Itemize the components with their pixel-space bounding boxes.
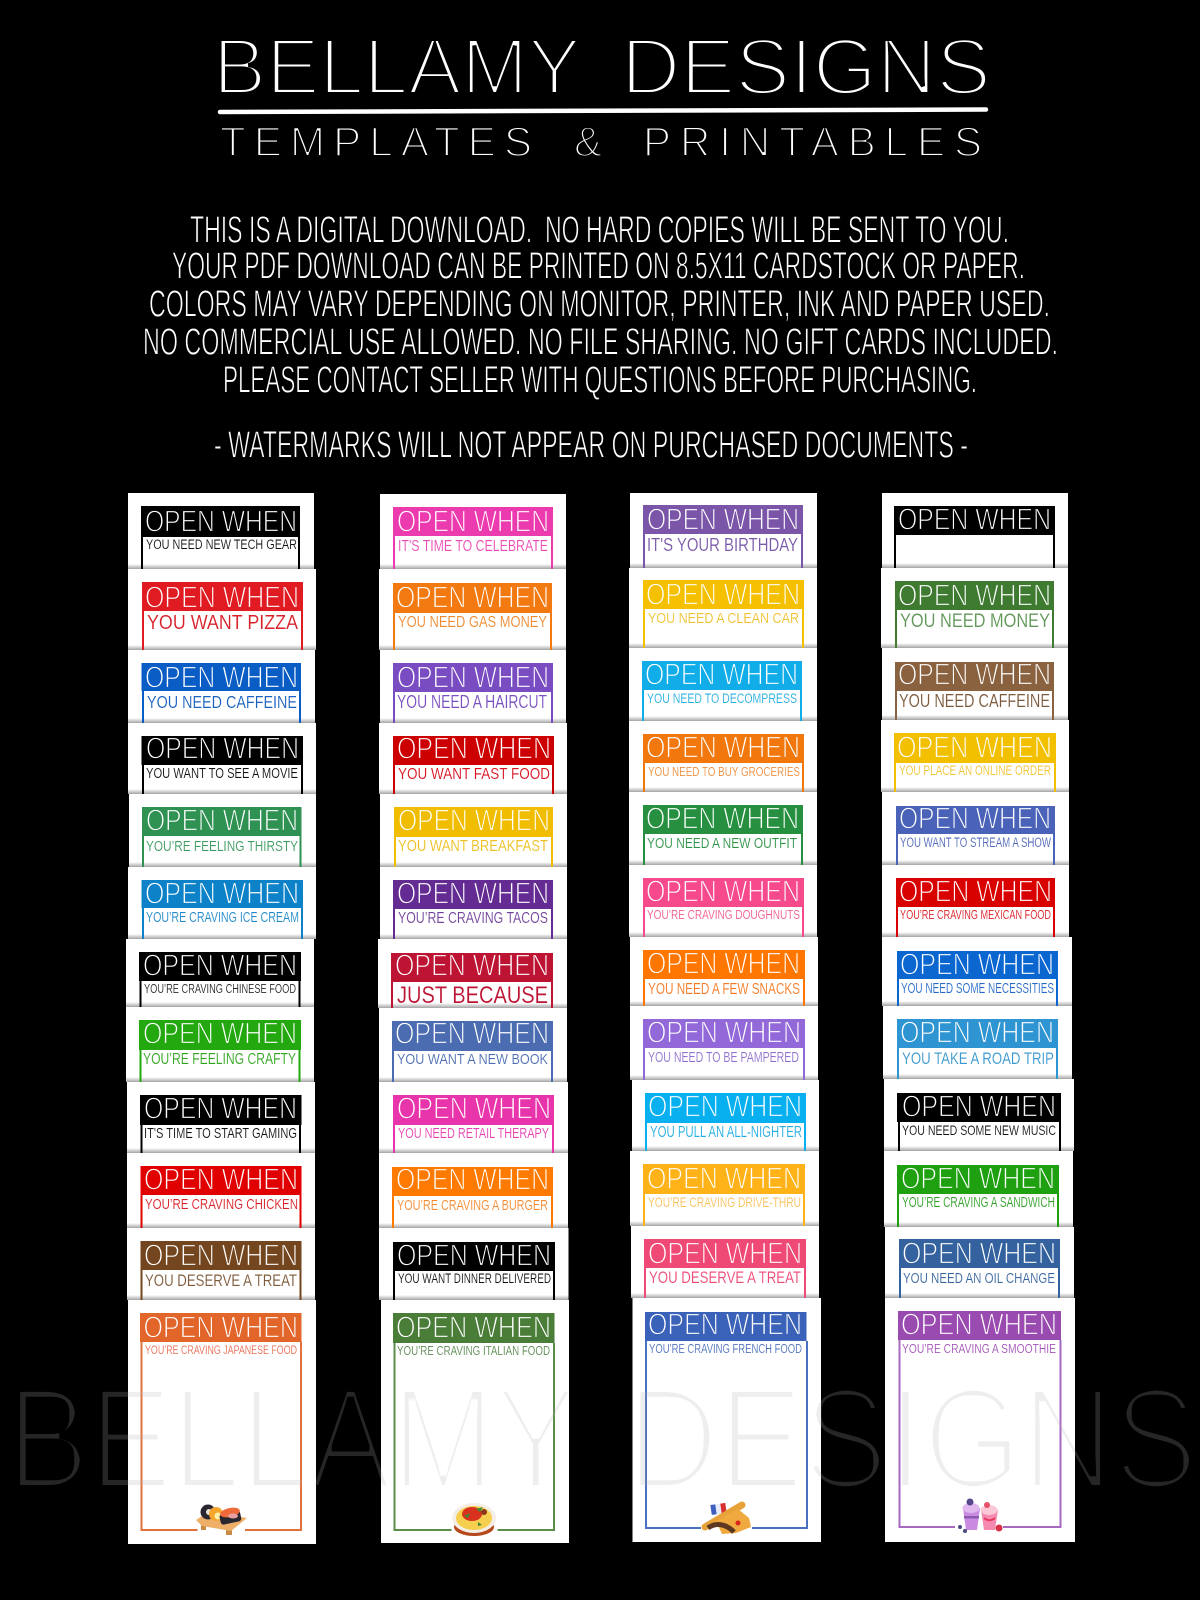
card: it's time to celebrate xyxy=(380,494,566,569)
header band: OPEN WHEN xyxy=(396,1310,551,1344)
card: you're craving ice cream xyxy=(128,867,316,939)
card: you're craving italian food xyxy=(381,1300,569,1543)
card: you deserve a treat pink xyxy=(631,1226,819,1298)
prompt: YOU NEED TO DECOMPRESS xyxy=(647,691,797,706)
subtitle xyxy=(220,118,982,165)
subtitle: TEMPLATES xyxy=(220,118,532,165)
header band: OPEN WHEN xyxy=(396,580,549,614)
header band: OPEN WHEN xyxy=(397,876,549,910)
card: you want pizza xyxy=(128,569,316,650)
card: you take a road trip xyxy=(883,1006,1072,1079)
card: you're craving a smoothie xyxy=(885,1298,1075,1542)
prompt: YOU NEED GAS MONEY xyxy=(398,614,547,631)
header band: OPEN WHEN xyxy=(397,660,549,694)
prompt: YOU’RE CRAVING ICE CREAM xyxy=(146,910,299,926)
prompt: YOU NEED TO BE PAMPERED xyxy=(648,1049,799,1066)
header band: OPEN WHEN xyxy=(395,948,549,982)
prompt: YOU NEED A NEW OUTFIT xyxy=(647,835,797,852)
brand title: BELLAMY xyxy=(213,22,581,111)
card: it's your birthday xyxy=(630,493,817,568)
header band: OPEN WHEN xyxy=(397,1238,551,1272)
prompt: YOU DESERVE A TREAT xyxy=(649,1269,801,1287)
prompt: YOU NEED CAFFEINE xyxy=(899,690,1050,711)
prompt: YOU NEED SOME NECESSITIES xyxy=(901,980,1054,997)
card: you need caffeine blue xyxy=(128,650,315,723)
title underline xyxy=(220,110,986,112)
prompt: YOU WANT TO STREAM A SHOW xyxy=(900,835,1051,850)
prompt: YOU NEED A CLEAN CAR xyxy=(648,610,799,627)
prompt: YOU TAKE A ROAD TRIP xyxy=(902,1050,1054,1068)
prompt: YOU NEED NEW TECH GEAR xyxy=(146,537,297,552)
card: you need some new music xyxy=(884,1079,1074,1151)
header band: OPEN WHEN xyxy=(646,800,799,836)
header band: OPEN WHEN xyxy=(144,1162,298,1196)
header band: OPEN WHEN xyxy=(143,1016,297,1050)
card: you deserve a treat brown xyxy=(127,1228,315,1300)
header band: OPEN WHEN xyxy=(902,1088,1056,1124)
card: you need a new outfit xyxy=(629,792,817,865)
card: you pull an all-nighter xyxy=(632,1080,819,1151)
header band: OPEN WHEN xyxy=(899,874,1052,908)
prompt: YOU PLACE AN ONLINE ORDER xyxy=(899,763,1051,778)
card: you place an online order xyxy=(881,720,1069,792)
icon: pasta plate xyxy=(452,1503,496,1536)
subtitle: & xyxy=(574,118,602,165)
prompt: YOU’RE CRAVING MEXICAN FOOD xyxy=(900,907,1051,922)
prompt: YOU’RE CRAVING CHICKEN xyxy=(145,1196,298,1213)
header band: OPEN WHEN xyxy=(146,802,298,838)
card: you're craving drive-thru xyxy=(630,1151,819,1226)
card: you're craving mexican food xyxy=(882,865,1069,937)
header band: OPEN WHEN xyxy=(398,802,550,838)
card: you need a clean car xyxy=(629,568,817,648)
header band: OPEN WHEN xyxy=(646,730,800,764)
prompt: YOU DESERVE A TREAT xyxy=(145,1272,297,1290)
brand title: DESIGNS xyxy=(621,22,991,111)
card: you want a new book xyxy=(379,1008,567,1082)
prompt: YOU NEED MONEY xyxy=(900,610,1050,632)
card: you're craving japanese food xyxy=(128,1300,316,1544)
card: you need to buy groceries xyxy=(629,721,817,792)
card: you want dinner delivered xyxy=(379,1228,568,1300)
prompt: YOU’RE CRAVING A SANDWICH xyxy=(902,1195,1055,1211)
header band: OPEN WHEN xyxy=(645,656,798,692)
header band: OPEN WHEN xyxy=(146,730,299,766)
prompt: YOU WANT DINNER DELIVERED xyxy=(398,1271,551,1286)
prompt: YOU’RE CRAVING TACOS xyxy=(398,910,548,927)
card: you need money xyxy=(881,568,1068,648)
card: you want to stream a show xyxy=(882,792,1069,865)
column 2 of cards xyxy=(378,494,569,1543)
subtitle: PRINTABLES xyxy=(643,118,982,165)
prompt: IT'S TIME TO CELEBRATE xyxy=(398,538,548,555)
header band: OPEN WHEN xyxy=(397,504,549,538)
header band: OPEN WHEN xyxy=(646,576,800,612)
card: you need to decompress xyxy=(629,648,817,721)
prompt: IT'S TIME TO START GAMING xyxy=(144,1125,297,1142)
header band: OPEN WHEN xyxy=(145,504,297,538)
header band: OPEN WHEN xyxy=(647,1160,801,1196)
column 1 of cards xyxy=(126,493,316,1544)
card: blank prompt black xyxy=(882,493,1068,568)
header band: OPEN WHEN xyxy=(898,502,1051,536)
prompt: YOU NEED SOME NEW MUSIC xyxy=(902,1122,1056,1138)
background watermark xyxy=(7,1358,1198,1519)
card: you're feeling crafty xyxy=(126,1007,314,1082)
header band: OPEN WHEN xyxy=(145,580,299,614)
header band: OPEN WHEN xyxy=(646,874,800,908)
notice text block xyxy=(143,208,1058,400)
prompt: YOU’RE CRAVING DRIVE-THRU xyxy=(648,1194,801,1210)
icon: smoothies xyxy=(958,1498,1002,1533)
header band: OPEN WHEN xyxy=(396,1162,549,1196)
header band: OPEN WHEN xyxy=(144,1238,298,1272)
prompt: JUST BECAUSE xyxy=(397,982,548,1009)
prompt: YOU’RE CRAVING FRENCH FOOD xyxy=(649,1341,802,1356)
header band: OPEN WHEN xyxy=(647,946,800,980)
prompt: YOU’RE CRAVING DOUGHNUTS xyxy=(647,907,800,922)
prompt: YOU’RE CRAVING CHINESE FOOD xyxy=(144,981,296,996)
header band: OPEN WHEN xyxy=(144,1090,297,1126)
brand title xyxy=(213,22,991,111)
prompt: YOU WANT TO SEE A MOVIE xyxy=(146,766,298,782)
card: you're craving a burger xyxy=(379,1153,568,1228)
card: you want fast food xyxy=(379,723,567,794)
prompt: YOU’RE CRAVING A BURGER xyxy=(397,1197,548,1214)
background watermark: BELLAMY xyxy=(7,1358,577,1519)
card: you need retail therapy xyxy=(379,1082,568,1153)
header band: OPEN WHEN xyxy=(902,1236,1056,1270)
card: you want breakfast xyxy=(380,794,567,867)
prompt: YOU PULL AN ALL-NIGHTER xyxy=(650,1124,802,1141)
header band: OPEN WHEN xyxy=(648,1306,802,1342)
card: you need caffeine brown xyxy=(882,648,1068,720)
header band: OPEN WHEN xyxy=(900,946,1054,982)
prompt: IT'S YOUR BIRTHDAY xyxy=(647,535,798,555)
card: it's time to start gaming xyxy=(127,1082,315,1153)
card: you're feeling thirsty xyxy=(129,794,316,867)
prompt: YOU WANT BREAKFAST xyxy=(398,838,548,855)
card: you need gas money xyxy=(379,569,566,650)
header band: OPEN WHEN xyxy=(143,948,297,982)
header band: OPEN WHEN xyxy=(397,730,551,766)
card: you're craving doughnuts xyxy=(629,865,817,937)
header band: OPEN WHEN xyxy=(647,1014,801,1050)
prompt: YOU WANT FAST FOOD xyxy=(398,766,550,783)
icon: sushi xyxy=(196,1504,247,1535)
header band: OPEN WHEN xyxy=(648,1236,802,1270)
column 4 of cards xyxy=(881,493,1075,1542)
prompt: YOU NEED AN OIL CHANGE xyxy=(903,1270,1055,1287)
card: you want to see a movie xyxy=(128,723,316,794)
prompt: YOU NEED A HAIRCUT xyxy=(397,692,547,712)
card: you need to be pampered xyxy=(630,1006,818,1080)
header band: OPEN WHEN xyxy=(648,1088,802,1124)
card: you need a haircut xyxy=(380,650,566,723)
prompt: YOU’RE CRAVING ITALIAN FOOD xyxy=(397,1343,550,1358)
card: you're craving a sandwich xyxy=(884,1151,1073,1227)
header band: OPEN WHEN xyxy=(900,1014,1054,1050)
card: you need a few snacks xyxy=(630,937,818,1006)
column 3 of cards xyxy=(629,493,821,1542)
prompt: YOU WANT A NEW BOOK xyxy=(397,1051,548,1068)
header band: OPEN WHEN xyxy=(898,656,1051,692)
header band: OPEN WHEN xyxy=(898,578,1051,612)
prompt: YOU’RE CRAVING JAPANESE FOOD xyxy=(145,1343,297,1357)
card: you're craving chinese food xyxy=(126,939,314,1007)
card: just because xyxy=(378,939,567,1009)
card: you're craving french food xyxy=(632,1298,821,1542)
prompt: YOU WANT PIZZA xyxy=(147,611,298,634)
prompt: YOU NEED CAFFEINE xyxy=(147,692,297,712)
header band: OPEN WHEN xyxy=(395,1016,549,1050)
prompt: YOU’RE FEELING THIRSTY xyxy=(146,838,298,855)
header band: OPEN WHEN xyxy=(899,800,1051,836)
header band: OPEN WHEN xyxy=(901,1306,1057,1342)
prompt: YOU’RE CRAVING A SMOOTHIE xyxy=(902,1341,1056,1356)
card: you're craving tacos xyxy=(380,867,567,939)
header band: OPEN WHEN xyxy=(647,502,799,536)
header band: OPEN WHEN xyxy=(145,660,298,694)
header band: OPEN WHEN xyxy=(145,876,299,910)
icon: french baguette and flag xyxy=(705,1503,751,1534)
prompt: YOU NEED A FEW SNACKS xyxy=(648,981,800,998)
prompt: YOU NEED RETAIL THERAPY xyxy=(398,1125,549,1142)
card: you're craving chicken xyxy=(127,1153,315,1228)
card: you need new tech gear xyxy=(128,493,314,569)
card: you need some necessities xyxy=(882,937,1072,1006)
header band: OPEN WHEN xyxy=(144,1310,298,1344)
header band: OPEN WHEN xyxy=(901,1160,1055,1196)
header band: OPEN WHEN xyxy=(897,730,1052,764)
prompt: YOU’RE FEELING CRAFTY xyxy=(143,1051,296,1068)
card: you need an oil change xyxy=(885,1227,1074,1298)
prompt: YOU NEED TO BUY GROCERIES xyxy=(648,764,800,779)
header band: OPEN WHEN xyxy=(397,1090,551,1126)
